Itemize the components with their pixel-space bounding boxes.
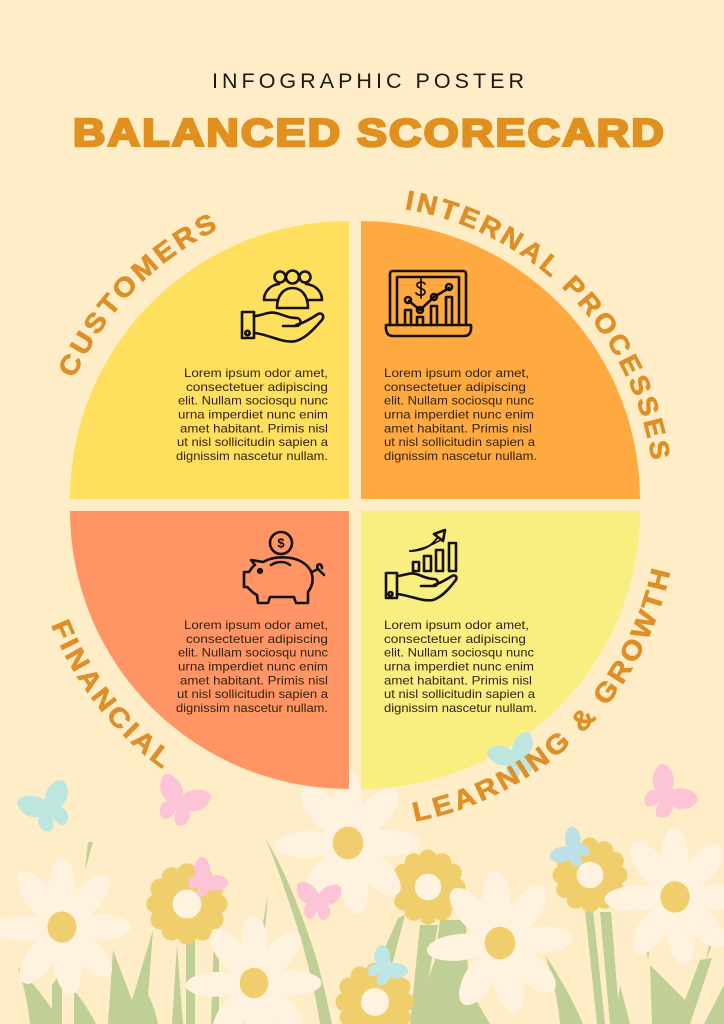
text block: learning and growth: dignissim nascetur nullam. — [384, 702, 537, 715]
title: main heading: BALANCED SCORECARD — [73, 112, 666, 155]
text block: learning and growth: consectetuer adipiscing — [384, 633, 526, 646]
text block: customers: elit. Nullam sociosqu nunc — [178, 395, 328, 408]
grass — [18, 838, 724, 1024]
text block: internal processes: elit. Nullam sociosqu nunc — [384, 395, 534, 408]
text block: internal processes: consectetuer adipiscing — [384, 381, 526, 394]
flowers: yellow blossoms — [146, 837, 628, 1024]
icon: piggy bank — [244, 532, 324, 603]
text block: financial: Lorem ipsum odor amet, — [184, 619, 328, 632]
text block: customers: ut nisl sollicitudin sapien a — [177, 436, 329, 449]
curved heading: customers: CUSTOMERS — [60, 214, 216, 375]
text block: financial: urna imperdiet nunc enim — [178, 660, 328, 674]
text block: customers: consectetuer adipiscing — [186, 381, 328, 394]
panel: customers quadrant — [70, 221, 349, 499]
text block: internal processes — [384, 367, 537, 463]
text block: learning and growth: urna imperdiet nunc enim — [384, 660, 534, 674]
curved heading: learning and growth: LEARNING & GROWTH — [412, 568, 670, 822]
text block: financial: dignissim nascetur nullam. — [176, 702, 328, 715]
text block: customers: Lorem ipsum odor amet, — [184, 367, 328, 380]
panel: internal processes quadrant — [361, 221, 640, 499]
text block: customers: urna imperdiet nunc enim — [178, 408, 328, 422]
text block: learning and growth: ut nisl sollicitudin sapien a — [384, 688, 536, 701]
curved heading: internal processes: INTERNAL PROCESSES — [406, 190, 670, 459]
text block: financial: consectetuer adipiscing — [186, 633, 328, 646]
icon: piggy bank: $ — [277, 536, 285, 550]
text block: learning and growth: Lorem ipsum odor amet, — [384, 619, 529, 632]
text block: financial: elit. Nullam sociosqu nunc — [178, 647, 328, 660]
text block: customers: dignissim nascetur nullam. — [176, 450, 328, 463]
text block: customers — [176, 367, 329, 463]
text block: learning and growth — [384, 619, 537, 715]
curved heading: financial: FINANCIAL — [51, 618, 165, 769]
icon: laptop with chart — [386, 271, 471, 336]
text block: financial: amet habitant. Primis nisl — [180, 674, 328, 687]
text block: customers: amet habitant. Primis nisl — [180, 422, 328, 435]
text block: internal processes: amet habitant. Primis nisl — [384, 422, 532, 435]
text block: learning and growth: elit. Nullam sociosqu nunc — [384, 647, 534, 660]
text block: financial — [176, 619, 329, 715]
butterfly over learning quadrant — [486, 730, 545, 785]
text block: internal processes: urna imperdiet nunc enim — [384, 408, 534, 422]
text block: learning and growth: amet habitant. Primis nisl — [384, 674, 532, 687]
title: subtitle: INFOGRAPHIC POSTER — [212, 69, 524, 93]
text block: internal processes: Lorem ipsum odor amet, — [384, 367, 529, 380]
butterflies — [15, 762, 700, 994]
flowers: daisies — [0, 771, 724, 1024]
text block: internal processes: dignissim nascetur nullam. — [384, 450, 537, 463]
icon: hand holding people — [242, 270, 323, 342]
panel: learning and growth quadrant — [361, 511, 640, 789]
text block: internal processes: ut nisl sollicitudin sapien a — [384, 436, 536, 449]
text block: financial: ut nisl sollicitudin sapien a — [177, 688, 329, 701]
icon: hand with growth chart — [386, 530, 456, 600]
panel: financial quadrant — [70, 511, 349, 789]
